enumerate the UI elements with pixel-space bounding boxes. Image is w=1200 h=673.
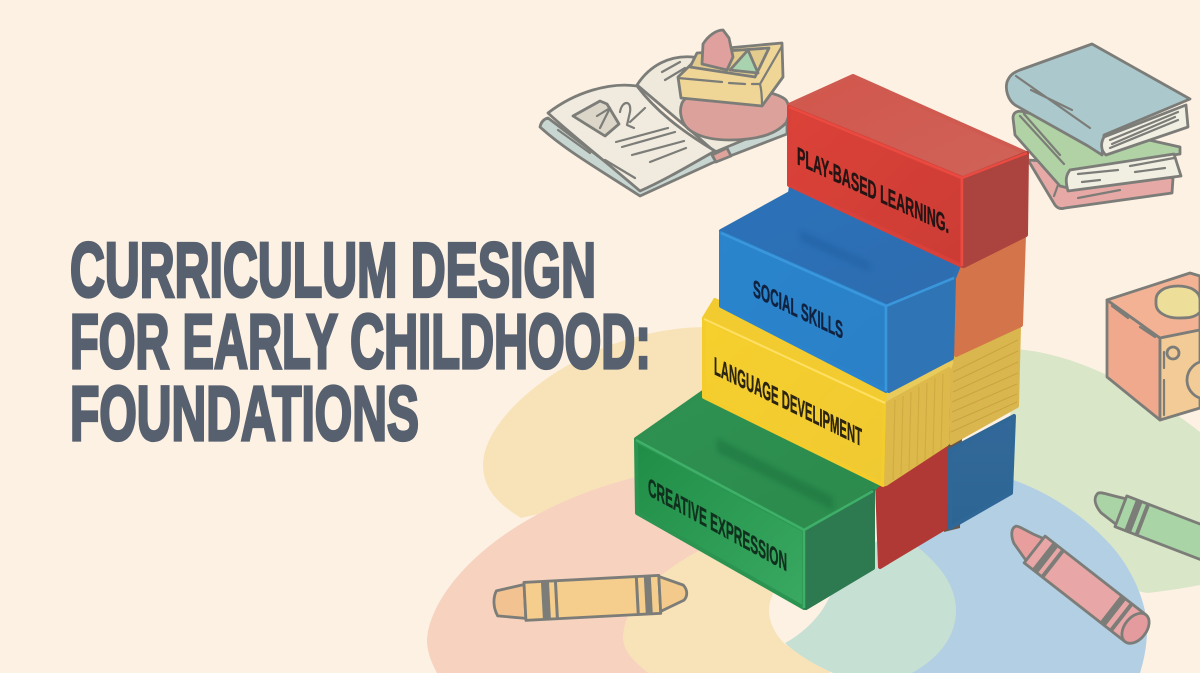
- camera lens: [1187, 361, 1200, 399]
- red block: play-based learning: [789, 76, 1027, 266]
- pink ring: [681, 89, 789, 140]
- title: [70, 228, 651, 457]
- toy box opening: [690, 48, 769, 77]
- camera right face: [1160, 330, 1200, 420]
- icon: pink crayon: [1001, 518, 1155, 648]
- pink block: [702, 30, 733, 70]
- camera left face: [1107, 300, 1160, 420]
- faint reflection on green top: [717, 438, 833, 510]
- icon: green crayon: [1088, 486, 1200, 573]
- faint reflection on blue top: [800, 230, 870, 272]
- small red block: [877, 447, 946, 567]
- camera viewfinder: [1167, 347, 1179, 359]
- wooden yellow side block: [951, 326, 1019, 443]
- page text lines: [558, 62, 686, 178]
- left page: [548, 85, 715, 191]
- green book: [1013, 111, 1180, 188]
- blue book: [1006, 44, 1190, 155]
- small blue block: [950, 416, 1014, 528]
- blue block: social skills: [721, 178, 962, 391]
- icon: toy camera block: [1107, 273, 1200, 420]
- icon: open book with toy box: [540, 30, 789, 196]
- icon: stacked books: [1006, 44, 1190, 209]
- yellow block: language development: LANGUAGE DEVELIPMENT: [714, 351, 862, 452]
- green block: [730, 50, 758, 73]
- toy box edges: [678, 46, 782, 106]
- right page: [637, 57, 787, 152]
- page illustration: [573, 101, 619, 136]
- blue block: social skills: SOCIAL SKILLS: [753, 275, 843, 345]
- pencil tail: [712, 148, 731, 162]
- icon: yellow crayon: [493, 574, 688, 622]
- toy box body: [678, 43, 783, 106]
- green block: creative expression: [636, 392, 885, 608]
- yellow block: language development: [704, 300, 952, 485]
- camera top button: [1156, 286, 1200, 318]
- camera top face: [1107, 273, 1200, 338]
- label: play-based learning: PLAY-BASED LEARNING.: [797, 141, 949, 239]
- title: FOR EARLY CHILDHOOD:: [70, 299, 651, 385]
- green block: creative expression: CREATIVE EXPRESSION: [648, 473, 787, 577]
- block stack: [636, 76, 1027, 608]
- title: CURRICULUM DESIGN: [70, 228, 596, 314]
- background colour blobs: [427, 327, 1200, 673]
- green book pages: [1066, 154, 1181, 191]
- shadow seam between side blocks: [944, 262, 966, 532]
- title: FOUNDATIONS: [70, 371, 419, 457]
- pink book: [1028, 160, 1173, 209]
- book cover: [540, 118, 787, 196]
- orange side block: [956, 235, 1024, 355]
- blue book pages: [1102, 105, 1188, 155]
